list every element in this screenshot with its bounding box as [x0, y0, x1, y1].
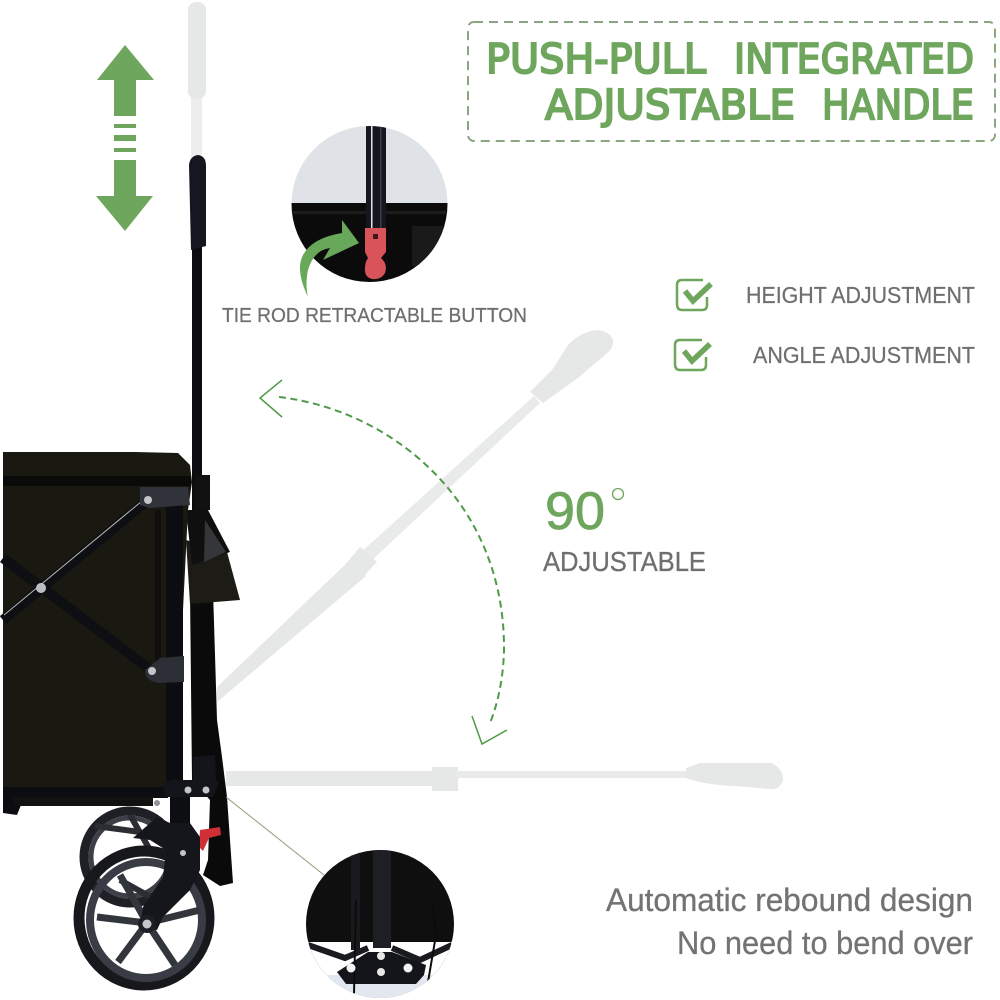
icon: check 2	[675, 340, 710, 370]
icon: check 1	[677, 280, 711, 310]
wagon body	[3, 452, 192, 795]
angle label: ANGLE ADJUSTMENT	[753, 342, 975, 368]
90 degree label: 90	[545, 482, 605, 541]
wagon frame pole	[3, 500, 183, 815]
icon: height arrow	[96, 45, 154, 231]
front fork	[133, 817, 200, 933]
red pedal	[199, 827, 221, 851]
rebound caption	[606, 882, 973, 961]
detail circle: rebound hinge	[304, 848, 456, 1000]
side pouch	[186, 510, 240, 604]
axle block	[154, 755, 219, 825]
title: PUSH-PULL	[486, 35, 706, 83]
tall handle pole	[189, 155, 210, 510]
wagon	[3, 155, 240, 985]
cross braces	[3, 500, 152, 671]
lower bracket	[145, 656, 184, 683]
height label: HEIGHT ADJUSTMENT	[746, 282, 975, 308]
upper bracket	[140, 487, 190, 508]
ghost handle: flat position	[226, 763, 783, 791]
red button	[365, 228, 386, 279]
title box	[468, 22, 995, 141]
90 degree label	[543, 482, 706, 577]
leader line	[226, 797, 324, 875]
button caption: TIE ROD RETRACTABLE BUTTON	[222, 305, 527, 327]
title	[486, 35, 974, 129]
ghost handle: angled position	[217, 330, 613, 702]
strap	[190, 590, 233, 886]
wagon rear wheel	[84, 811, 176, 905]
front wheel	[79, 851, 209, 985]
checklist	[675, 280, 975, 370]
title: INTEGRATED	[734, 35, 974, 83]
rebound caption: No need to bend over	[677, 925, 973, 961]
dashed angle arc arrow	[260, 380, 507, 744]
icon: curved green arrow	[300, 220, 359, 297]
90 degree label: ADJUSTABLE	[543, 546, 706, 577]
title: ADJUSTABLE	[545, 81, 795, 129]
ghost handle: raised position	[188, 2, 206, 160]
rebound caption: Automatic rebound design	[606, 882, 973, 918]
detail circle: retract button	[290, 124, 450, 285]
title: HANDLE	[822, 81, 974, 129]
